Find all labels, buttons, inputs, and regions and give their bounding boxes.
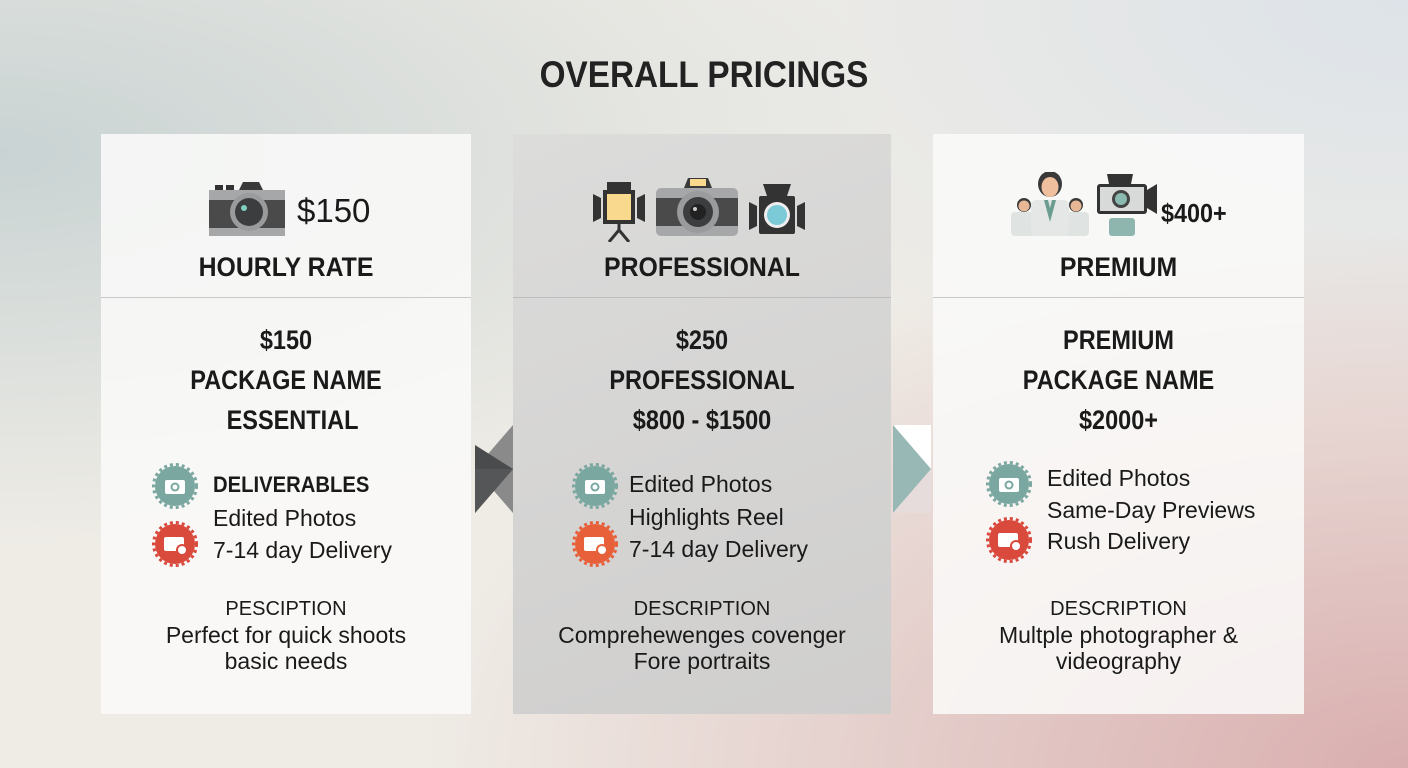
prices: $2000+ (1079, 405, 1158, 435)
description: Multple photographer & (999, 622, 1238, 648)
title: OVERALL PRICINGS (540, 54, 868, 95)
panel: premium (933, 134, 1304, 714)
header: hourly rate (101, 134, 471, 298)
prices: PACKAGE NAME (1023, 365, 1214, 395)
icon: teal badge (572, 463, 618, 509)
heading: PREMIUM (1060, 252, 1177, 282)
panel: professional (513, 134, 891, 714)
description: Perfect for quick shoots (166, 622, 406, 648)
description: DESCRIPTION (634, 598, 770, 620)
price: $400+: $400+ (1161, 198, 1227, 228)
deliverables list: DELIVERABLES (213, 472, 369, 497)
description: videography (1056, 648, 1181, 674)
deliverables list (213, 472, 392, 563)
prices: ESSENTIAL (227, 405, 358, 435)
deliverables list: Edited Photos (213, 504, 356, 530)
prices: PROFESSIONAL (609, 365, 795, 395)
heading: PROFESSIONAL (604, 252, 800, 282)
description (558, 598, 846, 674)
description: Comprehewenges covenger (558, 622, 846, 648)
deliverables list: 7-14 day Delivery (213, 537, 392, 563)
deliverables list: Edited Photos (629, 471, 772, 497)
deliverables list: Same-Day Previews (1047, 496, 1255, 522)
deliverables list (629, 471, 808, 562)
description: Fore portraits (634, 648, 770, 674)
icon: orange badge (572, 521, 618, 567)
prices: $250 (676, 325, 728, 355)
description: DESCRIPTION (1050, 598, 1187, 620)
prices (1023, 325, 1214, 435)
prices (609, 325, 795, 435)
description (999, 598, 1238, 674)
icon: red badge (152, 521, 198, 567)
price: $150: $150 (297, 192, 370, 229)
deliverables list (1047, 465, 1255, 554)
icon: camera (656, 178, 738, 236)
description: PESCIPTION (225, 598, 347, 620)
prices (190, 325, 382, 435)
icon: light (593, 182, 645, 242)
prices: $800 - $1500 (633, 405, 771, 435)
arrow: teal (893, 425, 931, 513)
deliverables list: Edited Photos (1047, 465, 1190, 491)
prices: PACKAGE NAME (190, 365, 382, 395)
arrow: gray (475, 425, 513, 513)
icon: red badge (986, 517, 1032, 563)
prices: PREMIUM (1063, 325, 1174, 355)
icon: camera operator (1097, 174, 1157, 236)
deliverables list: Highlights Reel (629, 504, 784, 530)
icon: people (1011, 172, 1089, 236)
description (166, 598, 406, 674)
description: basic needs (225, 648, 347, 674)
icon: video camera (749, 184, 805, 234)
icon: teal badge (986, 461, 1032, 507)
panel: hourly rate (101, 134, 471, 714)
heading: HOURLY RATE (199, 252, 373, 282)
deliverables list: 7-14 day Delivery (629, 536, 808, 562)
icon: camera (209, 182, 285, 236)
icon: teal badge (152, 463, 198, 509)
deliverables list: Rush Delivery (1047, 528, 1190, 554)
prices: $150 (260, 325, 312, 355)
